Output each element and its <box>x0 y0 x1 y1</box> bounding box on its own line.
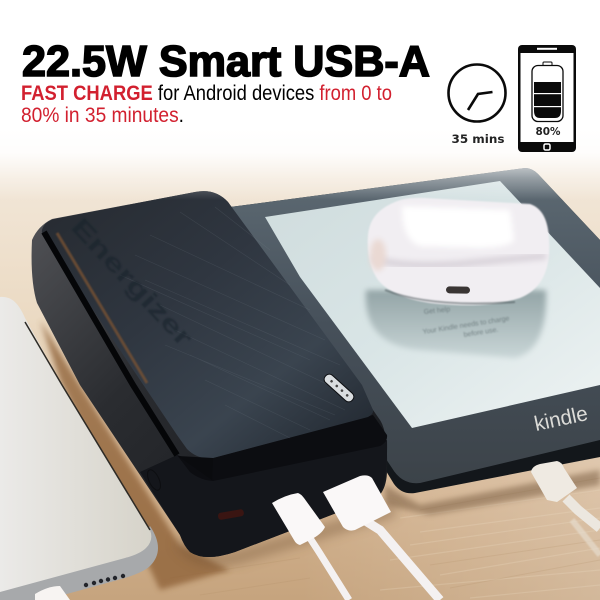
phone metal frame <box>0 526 158 600</box>
description line 1: FAST CHARGE for Android devices from 0 to <box>21 82 392 105</box>
kindle logo: kindle <box>532 402 590 436</box>
Kindle screen <box>265 181 600 428</box>
reflected screen text: Get help <box>423 306 451 316</box>
glossy orange reflection <box>57 233 147 383</box>
front face <box>140 440 387 557</box>
icon: phone with battery at 80% <box>518 45 576 152</box>
phone cable plug <box>35 586 70 600</box>
battery label: 80% <box>536 126 561 138</box>
title: 22.5W Smart USB-A <box>22 37 430 86</box>
embossed brand mark: Energizer <box>66 213 198 352</box>
Kindle cable <box>566 498 600 528</box>
white fade over the top of the photo <box>0 128 600 200</box>
reflected screen text: before use. <box>463 327 499 339</box>
brown shadow beside power bank <box>40 320 230 590</box>
case left warm tint <box>370 239 386 271</box>
bank body <box>32 191 387 557</box>
Kindle USB connector <box>531 461 577 502</box>
reflection under case <box>366 290 546 358</box>
USB-A connector <box>323 475 391 531</box>
case port <box>446 286 470 294</box>
micro USB port <box>218 509 244 520</box>
earbud case on Kindle <box>366 198 549 358</box>
USB-C cable <box>306 532 349 600</box>
white cables and connectors <box>272 461 600 600</box>
black power bank <box>32 191 395 560</box>
description line 2: 80% in 35 minutes. <box>21 104 184 127</box>
icon: clock <box>448 64 506 122</box>
case contact shadow <box>385 290 515 304</box>
wooden table <box>0 130 600 600</box>
bank shadow <box>180 510 395 560</box>
speaker grille <box>84 574 125 587</box>
phone edge line <box>25 322 150 530</box>
phone face <box>0 297 151 592</box>
case highlight <box>402 206 514 248</box>
reflected screen text <box>422 306 510 339</box>
USB-A cable <box>364 520 440 600</box>
corner gloss <box>178 456 213 480</box>
Kindle body edge <box>230 168 600 493</box>
case body <box>368 198 549 305</box>
phone frame <box>518 45 576 152</box>
battery <box>543 62 552 66</box>
Kindle e-reader <box>230 168 600 515</box>
reflected screen text: Your Kindle needs to charge <box>422 315 510 336</box>
bank top face <box>42 191 373 458</box>
lid front band <box>177 415 387 481</box>
case shading band <box>372 256 546 265</box>
photo: power bank charging devices on wooden table <box>0 130 600 600</box>
Kindle bezel <box>230 168 600 483</box>
indicator LED pill <box>322 372 356 404</box>
USB-C connector <box>272 493 325 545</box>
Kindle shadow <box>385 470 600 515</box>
power button <box>145 468 163 492</box>
brushed texture <box>120 207 350 438</box>
white phone at left <box>0 297 158 600</box>
home button <box>544 144 550 150</box>
clock label: 35 mins <box>452 132 505 146</box>
glossy black edge <box>44 232 177 455</box>
second blurred cable <box>572 520 600 555</box>
description text <box>21 82 392 127</box>
